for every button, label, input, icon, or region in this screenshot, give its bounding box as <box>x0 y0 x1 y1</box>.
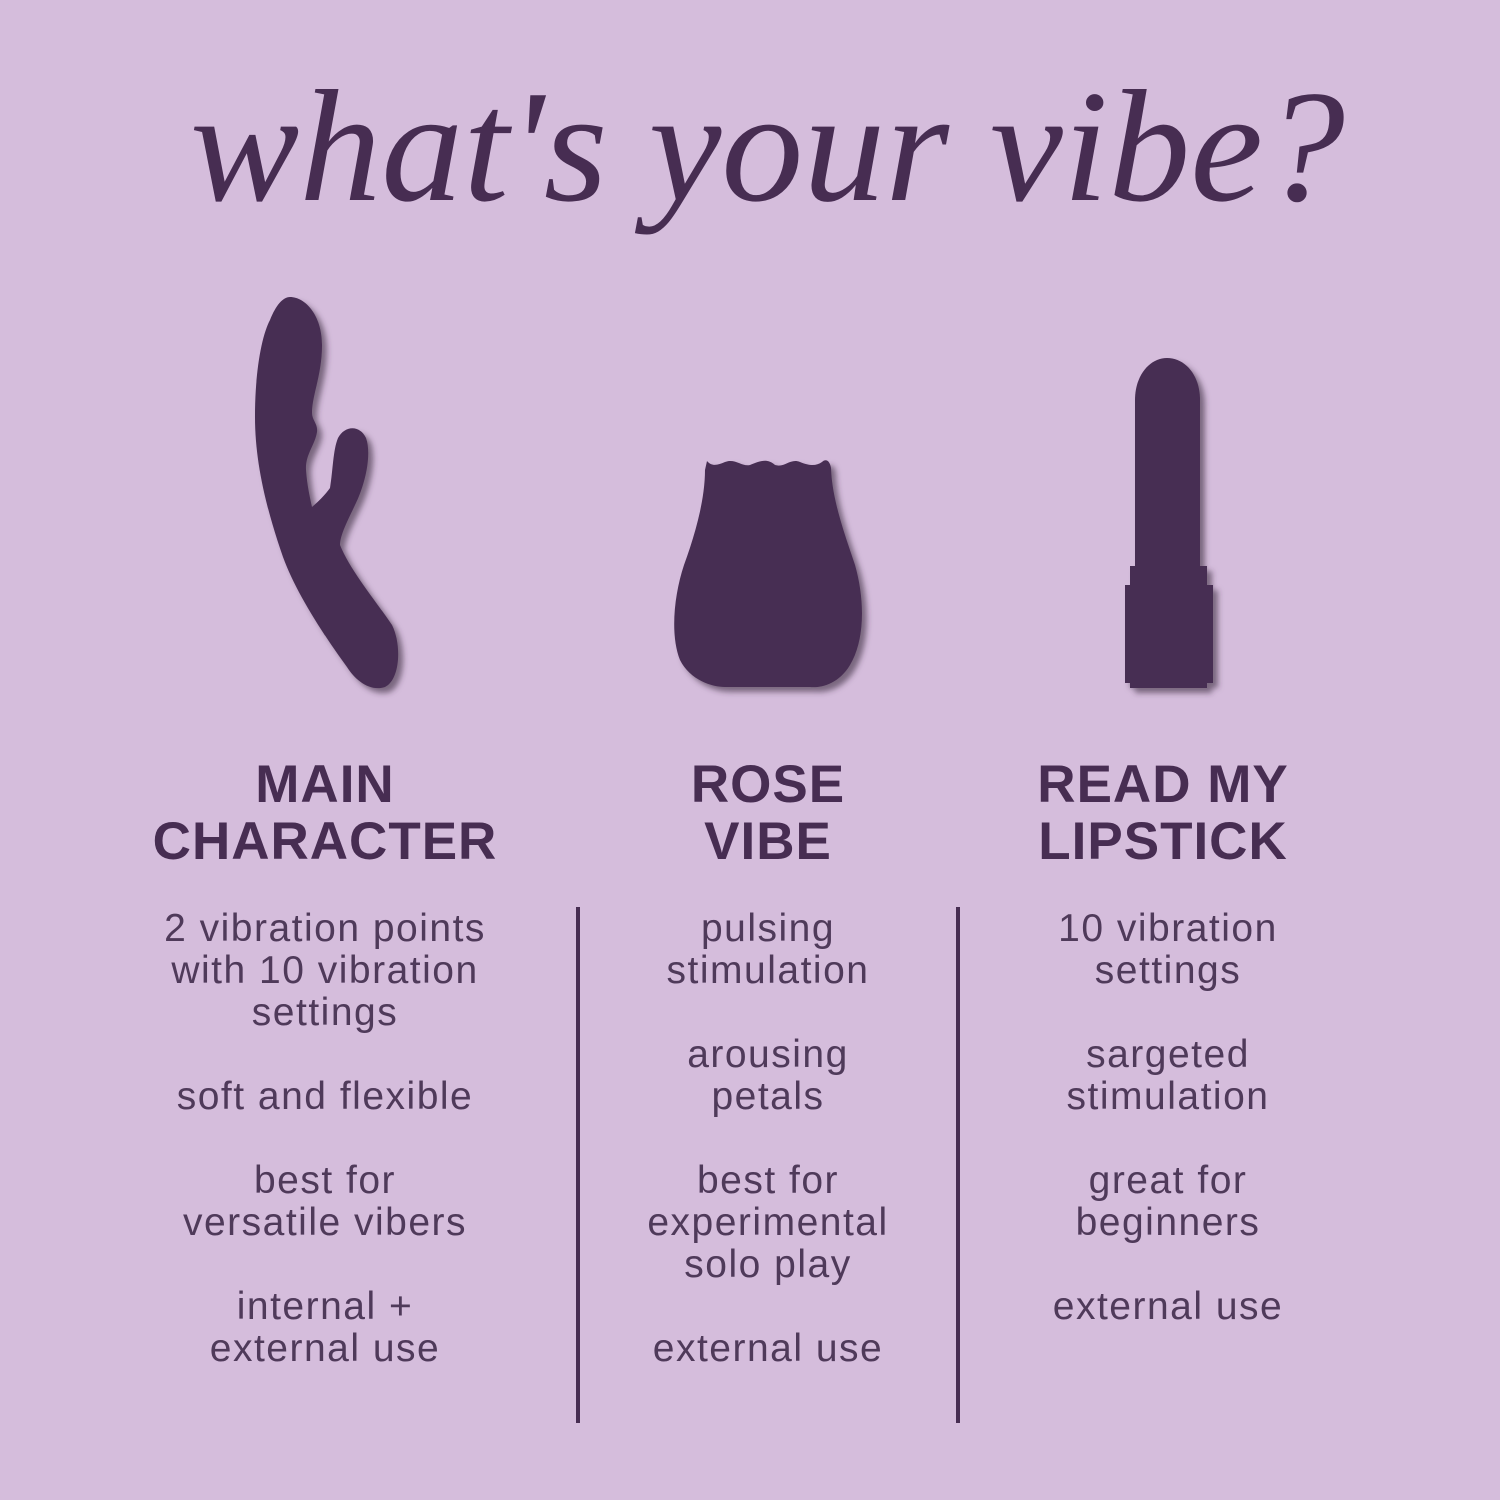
text: lipstick features: great for <box>1089 1159 1247 1202</box>
heading: rose vibe <box>691 755 845 871</box>
text: rose vibe features: petals <box>711 1075 825 1118</box>
icon: rabbit vibrator <box>255 297 398 688</box>
heading: read my lipstick: READ MY <box>1037 755 1289 814</box>
text: rose vibe features: solo play <box>684 1243 852 1286</box>
text: rose vibe features: pulsing <box>701 907 835 950</box>
text: main character features <box>164 907 486 1370</box>
text: lipstick features <box>1053 907 1283 1328</box>
text: main character features: 2 vibration points <box>164 907 486 950</box>
heading: read my lipstick: LIPSTICK <box>1038 812 1288 871</box>
text: rose vibe features: stimulation <box>667 949 869 992</box>
icon: rose vibe <box>674 460 862 687</box>
text: lipstick features: stimulation <box>1067 1075 1269 1118</box>
heading: main character: CHARACTER <box>153 812 497 871</box>
text: rose vibe features: external use <box>653 1327 883 1370</box>
text: rose vibe features: arousing <box>687 1033 849 1076</box>
text: rose vibe features: best for <box>697 1159 839 1202</box>
heading: main character: MAIN <box>255 755 395 814</box>
text: main character features: best for <box>254 1159 396 1202</box>
heading: rose vibe: ROSE <box>691 755 845 814</box>
text: main character features: external use <box>210 1327 440 1370</box>
text: lipstick features: external use <box>1053 1285 1283 1328</box>
heading: read my lipstick <box>1037 755 1289 871</box>
text: main character features: with 10 vibration <box>171 949 479 992</box>
text: main character features: internal + <box>237 1285 413 1328</box>
text: rose vibe features <box>647 907 889 1370</box>
text: main character features: soft and flexible <box>177 1075 473 1118</box>
text: lipstick features: 10 vibration <box>1058 907 1278 950</box>
heading: main character <box>153 755 497 871</box>
text: lipstick features: settings <box>1095 949 1241 992</box>
text: main character features: settings <box>252 991 398 1034</box>
text: lipstick features: sargeted <box>1086 1033 1250 1076</box>
icons <box>255 297 1222 697</box>
text: lipstick features: beginners <box>1076 1201 1260 1244</box>
text: rose vibe features: experimental <box>647 1201 889 1244</box>
heading: rose vibe: VIBE <box>704 812 832 871</box>
text: main character features: versatile vibers <box>183 1201 467 1244</box>
title: what's your vibe? <box>190 57 1345 235</box>
icon: lipstick <box>1125 358 1213 688</box>
